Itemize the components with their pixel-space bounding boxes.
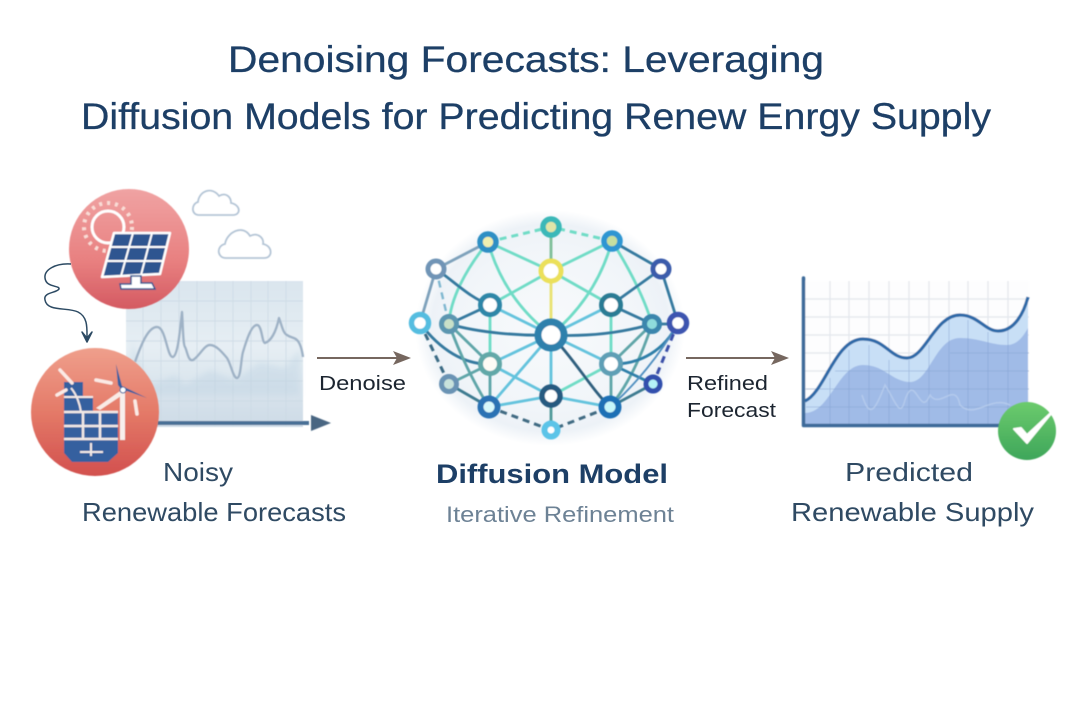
area chart [804,278,1029,426]
arrow: refined forecast [686,351,789,422]
icon: solar and wind in red circle [31,348,159,476]
arrow: refined forecast: Forecast [687,400,776,422]
network edges [420,227,678,430]
icon: solar panel in red circle [69,189,189,309]
dashed edges [420,227,678,430]
arrow: wavy connector [45,264,92,342]
panel: noisy renewable forecasts [31,189,346,527]
network nodes [412,219,686,436]
arrow: denoise [317,351,411,395]
label: iterative refinement: Iterative Refinement [446,502,675,527]
title: Diffusion Models for Predicting Renew Enrgy Supply [81,96,992,137]
title: Denoising Forecasts: Leveraging [228,39,824,80]
noisy chart [126,281,331,431]
title [81,39,992,137]
label: predicted renewable supply: Renewable Supply [791,497,1034,527]
label: noisy renewable forecasts [82,457,346,527]
arrow: denoise: Denoise [319,373,406,395]
arrow: refined forecast: Refined [687,373,768,395]
label: predicted renewable supply: Predicted [845,457,973,487]
icon: clouds [193,191,271,258]
panel: predicted renewable supply [791,278,1056,527]
panel: diffusion model network [412,210,686,527]
label: predicted renewable supply [791,457,1034,527]
label: noisy renewable forecasts: Noisy [163,457,233,487]
label: diffusion model: Diffusion Model [436,459,668,489]
label: noisy renewable forecasts: Renewable Forecasts [82,497,346,527]
icon: green check badge [998,402,1056,460]
